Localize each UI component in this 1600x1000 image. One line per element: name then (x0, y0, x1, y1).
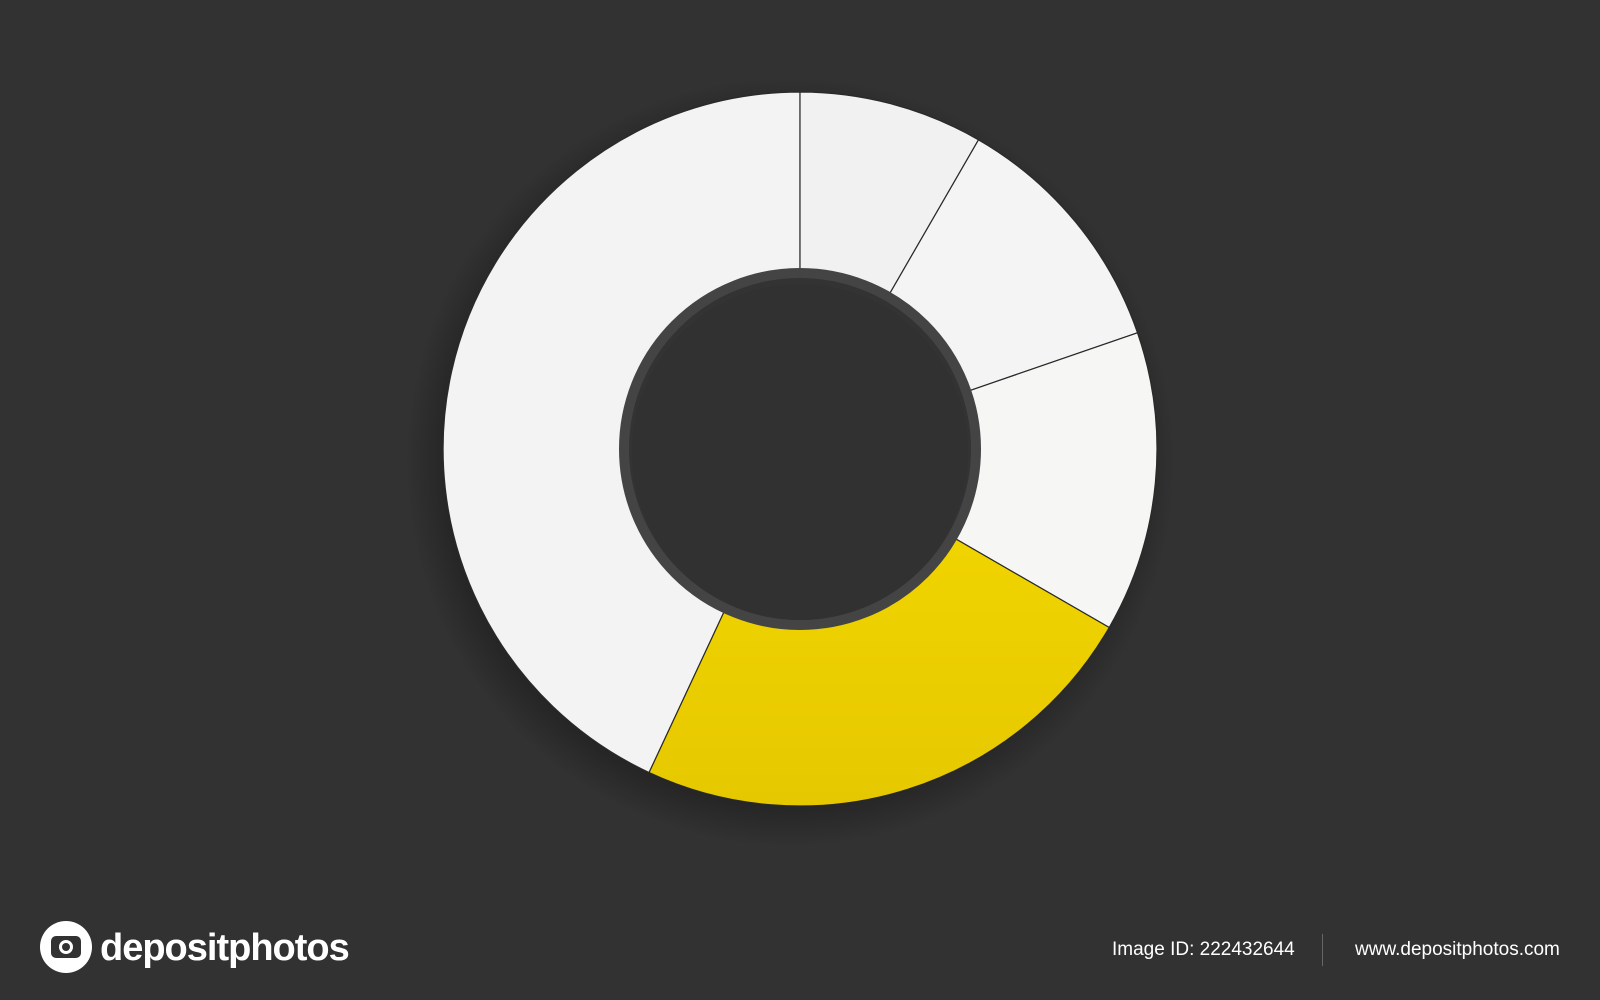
footer: image id: Image ID: 222432644 (1112, 939, 1295, 960)
donut hole (624, 273, 976, 625)
segment: white top (800, 92, 978, 296)
footer: logo (40, 921, 349, 973)
segment: white large (443, 92, 800, 772)
logo text: depositphotos (100, 927, 349, 969)
icon: camera logo (40, 921, 92, 973)
footer: url: www.depositphotos.com (1355, 939, 1560, 960)
segment: white right (953, 333, 1157, 628)
segment: yellow (649, 538, 1109, 806)
segment: white upper right (888, 140, 1138, 391)
